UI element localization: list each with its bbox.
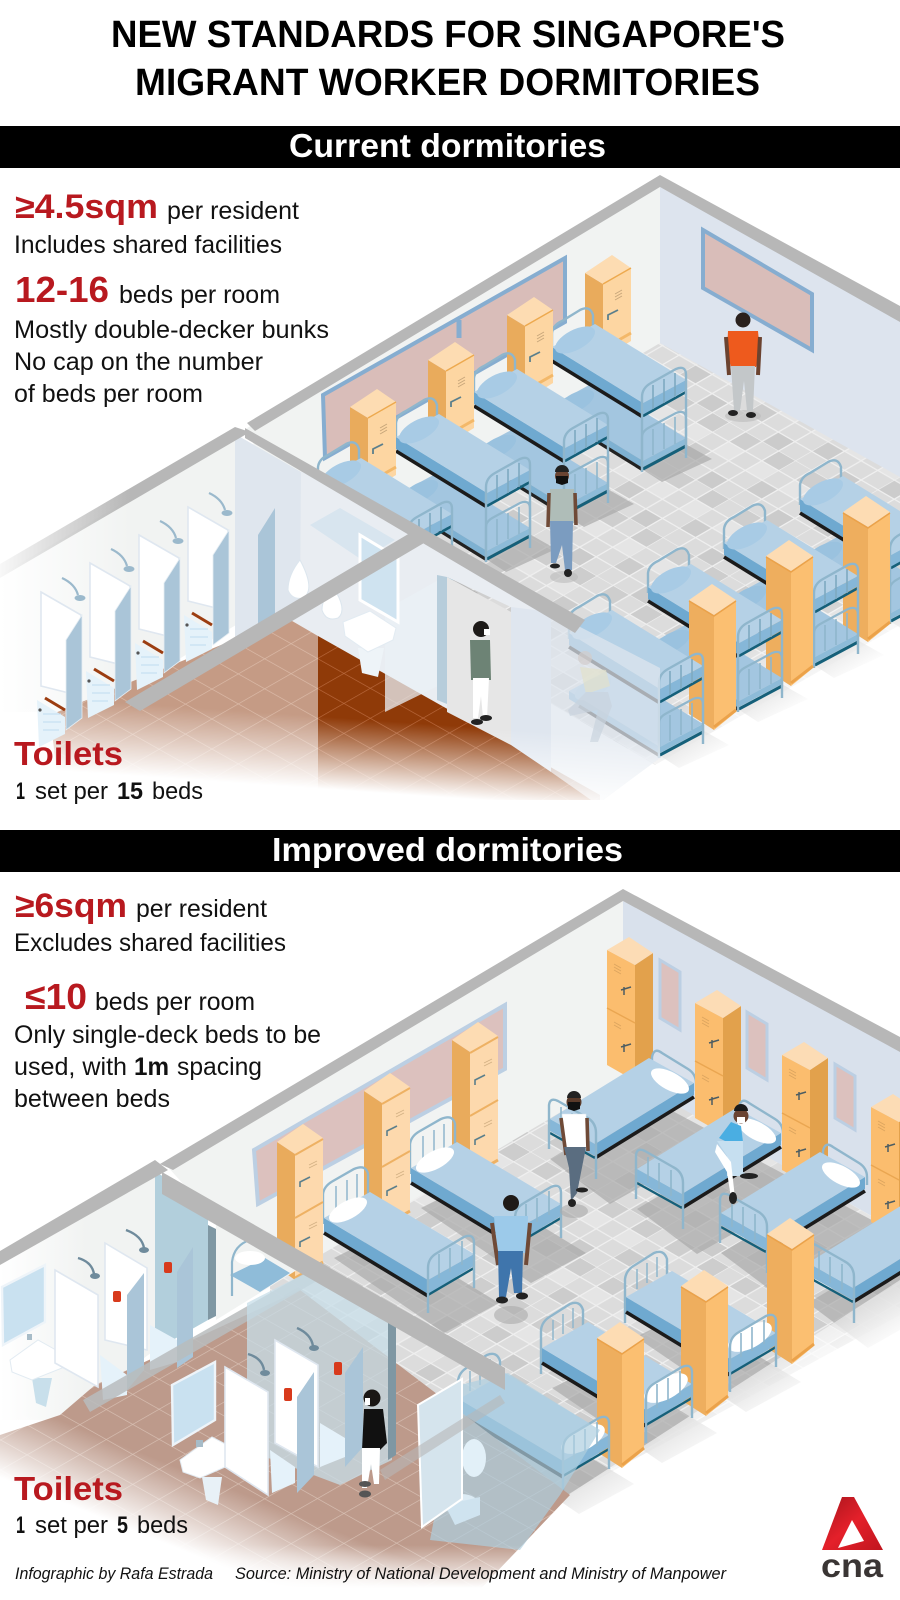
front locker 3: [843, 496, 890, 642]
wall locker 2: [364, 1073, 410, 1229]
stat: toilets: 5: [117, 1512, 128, 1539]
right bed 4: [807, 1195, 900, 1323]
bunk 2: [395, 398, 530, 562]
front mirror: [172, 1362, 215, 1445]
heading bar: current dormitories: Current dormitories: [289, 127, 606, 164]
urinals: [288, 560, 342, 619]
front locker 3: [767, 1218, 814, 1364]
stat: area per resident: ≥6sqm: [15, 887, 127, 925]
translucent partition: [385, 578, 442, 712]
toilet door: [418, 1379, 462, 1527]
outer wall band: [247, 175, 900, 431]
rear sink: [10, 1334, 63, 1407]
pale wash room background: [287, 468, 551, 712]
stat: beds per room: spacing: [177, 1053, 262, 1081]
see-through bed area: [310, 508, 395, 560]
icon: cna logo: [821, 1497, 884, 1584]
stat: toilets: [14, 1470, 188, 1539]
stat: beds per room: [14, 976, 321, 1113]
stat: beds per room: Only single-deck beds to be: [14, 1021, 321, 1049]
stat: toilets: 1: [16, 1512, 25, 1539]
lower glass band: [380, 1395, 505, 1480]
stat: beds per room: between beds: [14, 1085, 170, 1113]
stat: area per resident: ≥4.5sqm: [15, 188, 158, 226]
wall locker 3: [452, 1022, 498, 1178]
brick diagonal fade: [0, 1380, 900, 1600]
stat: area per resident: Includes shared facilities: [14, 231, 282, 259]
right window: [703, 230, 812, 350]
right wall windows: [660, 960, 855, 1130]
stat: toilets: Toilets: [14, 735, 123, 772]
bottom fade: [0, 1540, 900, 1600]
stat: toilets: beds: [152, 778, 203, 805]
front right bunk B: [647, 548, 782, 712]
person: black shirt, white trousers: [359, 1390, 387, 1498]
right locker 4: [871, 1094, 900, 1238]
stat: area per resident: Excludes shared facilities: [14, 929, 286, 957]
heading bar: improved dormitories: Improved dormitories: [272, 831, 623, 868]
right locker 1: [607, 937, 653, 1081]
light brick floor: [50, 618, 318, 800]
stat: beds per room: beds per room: [119, 281, 280, 309]
front sink: [180, 1437, 233, 1505]
stat: toilets: 1: [16, 778, 25, 805]
icon: cna logo: cna: [821, 1547, 884, 1584]
heading bar: improved dormitories: [0, 830, 900, 872]
toilet brick floor: [0, 1290, 570, 1600]
seated person, seen through glass: [568, 651, 612, 742]
front right bunk C: [723, 504, 858, 668]
front right bunk D: [799, 460, 900, 624]
right bed 1: [549, 1051, 696, 1179]
right locker 3: [782, 1042, 828, 1186]
stat: area per resident: [14, 188, 299, 259]
brick and floor fade: [0, 640, 660, 829]
stat: toilets: set per: [35, 1512, 108, 1539]
translucent front wall: [551, 612, 660, 800]
bed floor shadows: [334, 1099, 900, 1514]
stat: beds per room: beds per room: [95, 988, 255, 1016]
outer wall band: [160, 889, 900, 1170]
divider wall band: [162, 1172, 505, 1390]
toilet front wall band: [125, 533, 424, 711]
bed floor shadows: [328, 397, 900, 768]
back locker 1: [350, 389, 396, 492]
stat: beds per room: No cap on the number: [14, 348, 263, 376]
floor fade: [560, 560, 900, 800]
front jamb: [388, 1322, 396, 1460]
end door: [258, 508, 275, 630]
rear mirror: [2, 1265, 45, 1345]
person: light blue shirt, blue jeans: [492, 1195, 530, 1324]
front bed 0: [458, 1354, 609, 1494]
stat: beds per room: of beds per room: [14, 380, 203, 408]
left wall: [247, 187, 660, 560]
toilet bowl: [445, 1439, 486, 1525]
front teal glass wall: [247, 1265, 392, 1485]
toilet outer wall band: [0, 427, 250, 578]
right bed 2: [636, 1101, 783, 1229]
footer credits: Source: Ministry of National Development and Ministry of Manpower: [235, 1564, 727, 1583]
back locker 2: [428, 342, 474, 445]
footer credits: [15, 1564, 727, 1583]
panel: improved dormitories: [0, 830, 900, 1600]
solid front wall: [511, 607, 551, 772]
floor tiles: [300, 343, 900, 765]
person: orange shirt: [725, 312, 761, 422]
shower stall 1: [37, 578, 86, 747]
shower stall 3: [135, 521, 184, 690]
right wall: [623, 901, 900, 1235]
stat: beds per room: [14, 269, 329, 408]
stat: beds per room: ≤10: [25, 976, 87, 1017]
door jamb bar: [437, 575, 447, 704]
bed 1: [323, 1167, 474, 1313]
back window left: [323, 258, 565, 458]
toilet outer wall band: [0, 1160, 168, 1265]
stat: beds per room: used, with: [14, 1053, 127, 1081]
title: [111, 14, 785, 104]
stat: toilets: beds: [137, 1512, 188, 1539]
back locker 3: [507, 297, 553, 400]
front bed 1: [541, 1303, 692, 1443]
shower stall 2: [86, 549, 134, 718]
stat: area per resident: per resident: [136, 895, 267, 923]
right wall: [660, 187, 900, 480]
shower stall 4: [184, 493, 232, 662]
toilet back wall: [0, 1172, 155, 1420]
front right bunk A: [568, 594, 703, 758]
sink and mirror: [343, 535, 398, 677]
right bed 3: [720, 1145, 867, 1273]
person: green shirt, white trousers: [470, 621, 492, 725]
floor tiles: [270, 1075, 900, 1497]
stat: beds per room: 1m: [134, 1053, 169, 1081]
stat: toilets: [14, 735, 203, 805]
toilet left wall: [0, 437, 236, 712]
illustration: improved dorm room: [0, 889, 900, 1600]
stat: toilets: Toilets: [14, 1470, 123, 1507]
front locker 2: [681, 1270, 728, 1416]
bed 2: [410, 1117, 561, 1263]
front locker 2: [766, 540, 813, 686]
wall locker 1: [277, 1124, 323, 1280]
dark brick floor: [318, 636, 600, 800]
title: NEW STANDARDS FOR SINGAPORE'S: [111, 14, 785, 56]
bed seen through doorway: [216, 1215, 305, 1320]
front locker 1: [689, 584, 736, 730]
glass over bed near toilet: [430, 1373, 600, 1550]
floor fade: [520, 1280, 900, 1600]
heading bar: current dormitories: [0, 126, 900, 168]
back locker 4: [585, 255, 631, 358]
stat: toilets: 15: [117, 778, 143, 805]
stat: area per resident: [14, 887, 286, 957]
person: grey shirt, mask: [548, 465, 578, 583]
stat: beds per room: Mostly double-decker bunks: [14, 316, 329, 344]
person: seated, blue shirt: [715, 1104, 758, 1204]
bunk 1: [317, 442, 452, 606]
stat: area per resident: per resident: [167, 197, 299, 225]
left wall: [166, 901, 623, 1285]
stat: toilets: set per: [35, 778, 108, 805]
doorway jamb: [208, 1225, 216, 1320]
right locker 2: [695, 990, 741, 1134]
divider wall band: [245, 428, 585, 633]
front locker 1: [597, 1322, 644, 1468]
back window: [254, 1005, 505, 1204]
front shower stalls: [225, 1328, 363, 1495]
bunk 3: [473, 353, 608, 517]
bunk 4: [551, 308, 686, 472]
panel: current dormitories: [0, 126, 900, 829]
footer credits: Infographic by Rafa Estrada: [15, 1564, 213, 1583]
person: white shirt, dark jeans: [560, 1091, 588, 1218]
front bed 2: [625, 1252, 776, 1392]
rear shower panels: [55, 1230, 193, 1400]
doorway floor: [447, 577, 511, 745]
translucent front wall band: [83, 1262, 322, 1412]
toilet teal wall: [155, 1172, 208, 1350]
illustration: current dorm room: [0, 175, 900, 829]
toilet right wall: [235, 434, 301, 640]
stat: beds per room: 12-16: [15, 269, 109, 310]
title: MIGRANT WORKER DORMITORIES: [135, 62, 760, 104]
